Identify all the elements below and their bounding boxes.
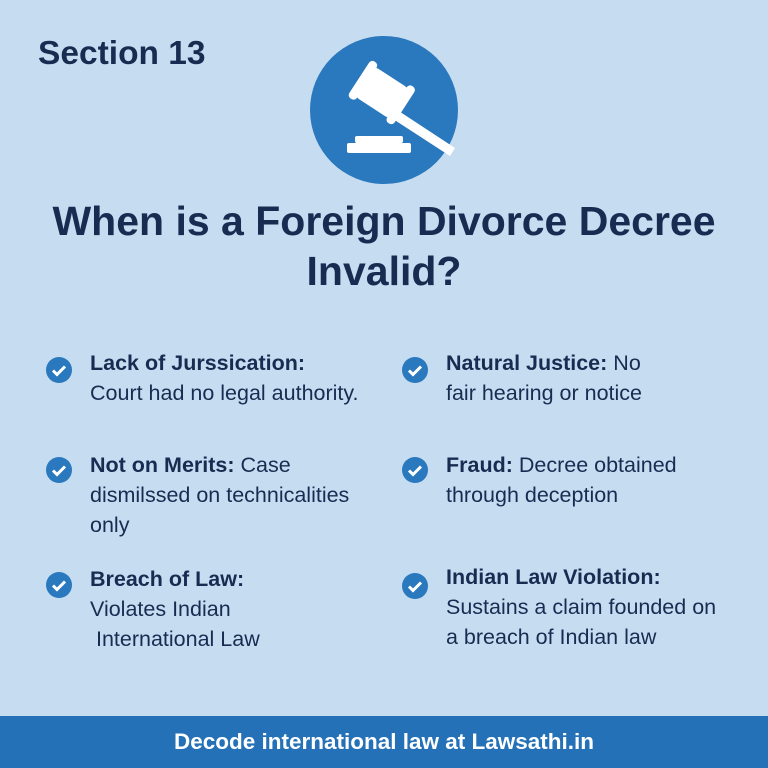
item: breach of law [46,567,260,651]
item: indian law violation: Sustains a claim founded on [446,595,716,619]
item: fraud [402,453,677,507]
heading: section label: Section 13 [38,35,206,72]
item: indian law violation: Indian Law Violation: [446,565,661,589]
item: not on merits: dismilssed on technicalities [90,483,349,507]
icon: gavel in circle [310,36,458,184]
item: fraud: Fraud: Decree obtained [446,453,677,477]
item: fraud: through deception [446,483,618,507]
item: not on merits [46,453,349,537]
item: not on merits: Not on Merits: Case [90,453,291,477]
item: breach of law: Breach of Law: [90,567,244,591]
item: breach of law: Violates Indian [90,597,231,621]
footer banner [0,716,768,768]
title: When is a Foreign Divorce Decree [52,198,716,244]
item: lack of jurisdiction: Court had no legal authority. [90,381,359,405]
item: natural justice: fair hearing or notice [446,381,642,405]
item: breach of law: International Law [96,627,260,651]
item: not on merits: only [90,513,129,537]
footer banner: Decode international law at Lawsathi.in [174,729,594,754]
item: lack of jurisdiction [46,351,359,405]
item: natural justice: Natural Justice: No [446,351,641,375]
item: indian law violation: a breach of Indian law [446,625,656,649]
item: indian law violation [402,565,716,649]
item: lack of jurisdiction: Lack of Jurssication: [90,351,305,375]
item: natural justice [402,351,642,405]
title [52,198,716,294]
title: Invalid? [307,248,461,294]
